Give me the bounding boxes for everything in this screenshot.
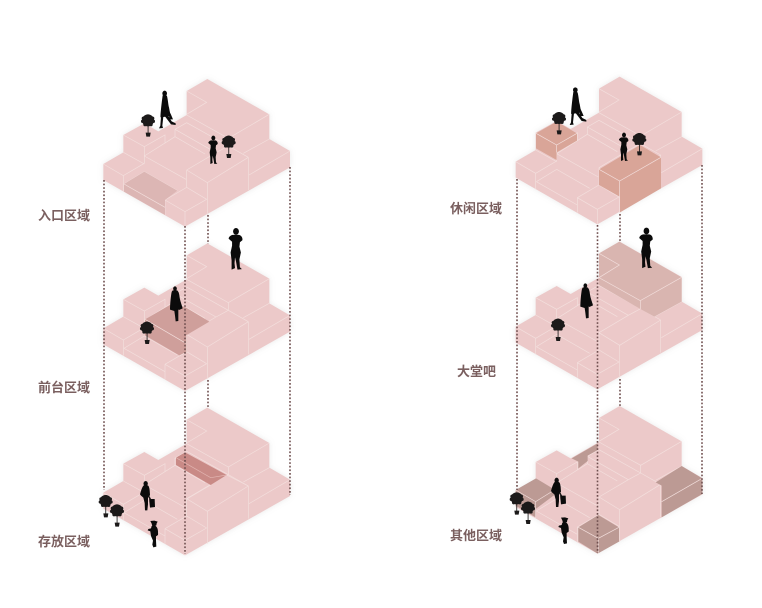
plant bbox=[222, 136, 236, 158]
person with luggage bbox=[140, 481, 155, 510]
highlighted large block bbox=[599, 145, 661, 213]
plant bbox=[140, 322, 154, 344]
plant bbox=[551, 319, 565, 341]
shaded rear block bbox=[572, 443, 598, 468]
label: reception area: 前台区域 bbox=[38, 380, 90, 395]
person on phone bbox=[208, 136, 218, 164]
person walking bbox=[159, 91, 176, 128]
plant bbox=[99, 495, 113, 517]
highlighted upper block bbox=[599, 242, 682, 317]
diagram: other areas bbox=[510, 406, 702, 554]
person on phone bbox=[639, 228, 653, 268]
diagram: reception area bbox=[103, 228, 290, 391]
shaded right block bbox=[656, 466, 702, 517]
plant bbox=[141, 114, 155, 137]
label: lobby bar: 大堂吧 bbox=[457, 364, 496, 379]
label: other areas: 其他区域 bbox=[450, 528, 502, 543]
person in hat bbox=[558, 517, 569, 544]
highlighted storage trough bbox=[176, 452, 248, 499]
person standing on phone bbox=[229, 228, 242, 270]
highlighted reception floor bbox=[145, 304, 209, 355]
shaded front block bbox=[578, 515, 619, 554]
person walking bbox=[570, 87, 586, 125]
label: leisure area: 休闲区域 bbox=[450, 201, 502, 216]
plant bbox=[632, 133, 646, 155]
plant bbox=[552, 112, 566, 134]
diagram: entrance area bbox=[103, 79, 290, 227]
highlighted entrance floor bbox=[124, 172, 177, 215]
highlighted small block bbox=[536, 122, 577, 160]
person with luggage bbox=[551, 478, 566, 507]
diagram: lobby bar bbox=[516, 228, 702, 389]
label: storage area: 存放区域 bbox=[38, 534, 90, 549]
person in coat bbox=[170, 286, 183, 321]
person on phone bbox=[619, 133, 628, 161]
diagram: leisure area bbox=[516, 77, 702, 224]
person in coat bbox=[580, 283, 593, 318]
label: entrance area: 入口区域 bbox=[38, 208, 90, 223]
person in hat bbox=[148, 521, 158, 547]
shaded left block bbox=[516, 478, 554, 517]
diagram: storage area bbox=[99, 408, 290, 555]
plant bbox=[521, 502, 535, 524]
plant bbox=[110, 504, 124, 527]
plant bbox=[510, 492, 524, 515]
dotted connector lines bbox=[104, 165, 702, 554]
